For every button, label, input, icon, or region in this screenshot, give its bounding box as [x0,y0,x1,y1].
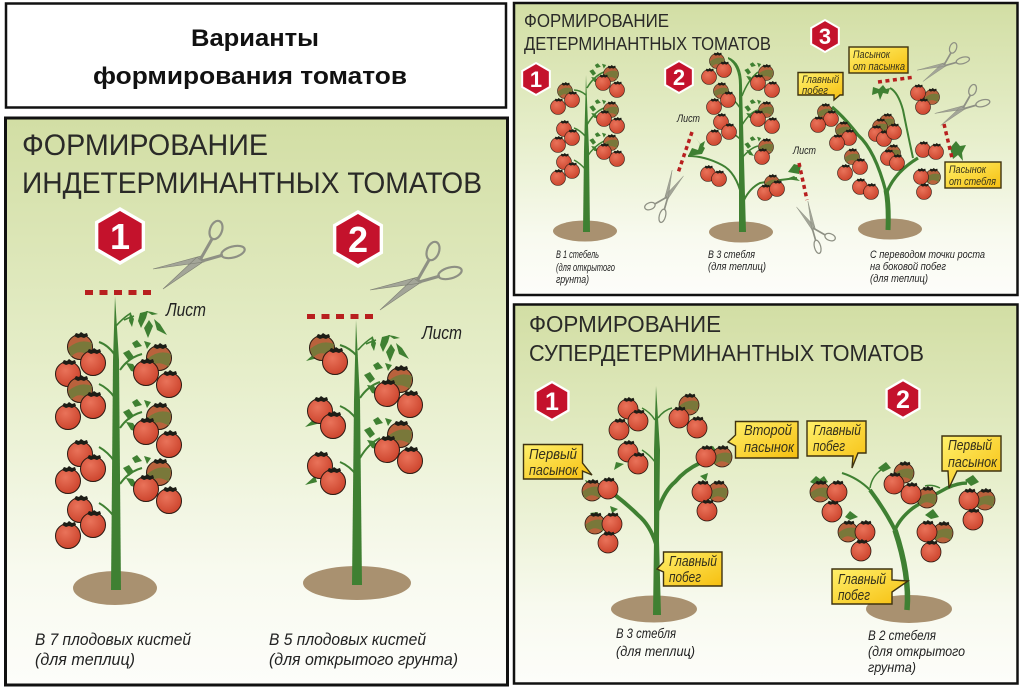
caption 1: (для теплиц) [616,643,695,659]
title box: формирования томатов [93,63,407,90]
cut line right [799,163,807,200]
caption 1: (для открытого [556,262,615,274]
callout: side shoot of shoot [849,47,908,73]
caption 1: (для теплиц) [35,650,135,669]
callout: main shoot: Главный [802,74,839,86]
heading: superdeterminate [529,311,924,366]
panel: indeterminate tomatoes [6,118,508,685]
heading: determinate [524,11,771,54]
caption 1: В 7 плодовых кистей [35,630,191,649]
title box: Варианты [191,25,319,52]
plant 2 [303,320,422,600]
callout: main shoot [798,72,843,100]
callout: first side shoot right: пасынок [948,454,998,471]
callout: main shoot right upper [807,421,866,468]
badge 3 [811,20,839,52]
title box [6,4,506,108]
badge 2 [887,380,919,418]
callout: side shoot of shoot: Пасынок [853,49,891,61]
badge 1: 1 [545,388,559,416]
badge 2 [335,212,381,266]
caption 3: (для теплиц) [870,273,928,285]
panel: superdeterminate tomatoes [514,304,1018,684]
scissors left [644,170,684,223]
callout: side shoot of stem [945,162,1001,188]
caption 2 [269,630,458,669]
caption 1 [616,625,695,659]
caption 2: грунта) [868,659,916,675]
callout: main shoot left [657,552,722,586]
callout: main shoot right lower: Главный [838,571,887,588]
heading: determinate: ФОРМИРОВАНИЕ [524,11,669,31]
badge 2: 2 [673,65,685,90]
badge 1 [97,209,143,263]
caption 1: В 1 стебель [556,249,599,261]
heading: superdeterminate: ФОРМИРОВАНИЕ [529,311,721,337]
callout: second side shoot: Второй [744,422,793,439]
caption 1 [556,249,615,286]
caption 2 [708,249,766,273]
plant 2 [810,461,995,623]
callout: second side shoot: пасынок [744,439,795,456]
caption 2 [868,627,965,675]
leaf label 1: Лист [165,300,206,320]
caption 2: В 2 стебеля [868,627,936,643]
plant 1 [582,386,732,622]
leaf label 2: Лист [421,323,462,343]
callout: main shoot right upper: побег [813,438,845,455]
caption 3: С переводом точки роста [870,249,985,261]
badge 2 [665,61,693,93]
panel: determinate tomatoes [514,3,1018,295]
heading: indeterminate [22,129,482,200]
callout: main shoot left: побег [669,569,701,586]
callout: first side shoot right [942,436,1001,488]
callout: first side shoot [524,444,592,479]
heading: indeterminate: ИНДЕТЕРМИНАНТНЫХ ТОМАТОВ [22,167,482,200]
scissors 1 [153,219,246,289]
cut line left [678,132,692,173]
plant 1 [550,63,624,242]
callout: first side shoot right: Первый [948,437,993,454]
plant 2 [688,52,801,242]
callout: side shoot of stem: от стебля [949,176,996,188]
badge 3: 3 [819,24,831,49]
callout: main shoot right lower: побег [838,587,870,604]
badge 1 [536,382,568,420]
scissors right [796,201,836,254]
caption 3 [870,249,985,285]
scissors top [917,42,970,82]
scissors middle [935,83,991,125]
cut line 1 [85,290,152,295]
callout: main shoot right lower [832,569,908,604]
cut line top [878,77,915,82]
heading: indeterminate: ФОРМИРОВАНИЕ [22,129,268,162]
callout: main shoot right upper: Главный [813,422,862,439]
heading: determinate: ДЕТЕРМИНАНТНЫХ ТОМАТОВ [524,34,771,54]
leaf label right: Лист [792,145,816,157]
callout: side shoot of shoot: от пасынка [853,61,905,73]
badge 2: 2 [348,219,368,260]
heading: superdeterminate: СУПЕРДЕТЕРМИНАНТНЫХ ТОМАТОВ [529,340,924,366]
caption 2: (для открытого [868,643,965,659]
callout: first side shoot: Первый [529,446,578,463]
caption 2: (для теплиц) [708,261,766,273]
badge 1: 1 [530,67,542,92]
callout: second side shoot [728,422,798,458]
callout: side shoot of stem: Пасынок [949,164,987,176]
badge 1 [522,63,550,95]
plant 3 [810,84,966,240]
cut line 2 [307,314,374,319]
caption 1 [35,630,191,669]
caption 1: грунта) [556,274,589,286]
callout: main shoot left: Главный [669,553,718,570]
cut line stem [944,124,952,158]
badge 2: 2 [896,386,910,414]
caption 2: В 3 стебля [708,249,755,261]
leaf label left: Лист [676,113,700,125]
caption 1: В 3 стебля [616,625,676,641]
caption 3: на боковой побег [870,261,946,273]
callout: first side shoot: пасынок [529,462,579,479]
plant 1 [56,296,182,605]
caption 2: В 5 плодовых кистей [269,630,426,649]
badge 1: 1 [110,216,130,257]
callout: main shoot: побег [802,85,828,97]
scissors 2 [370,240,463,310]
caption 2: (для открытого грунта) [269,650,458,669]
